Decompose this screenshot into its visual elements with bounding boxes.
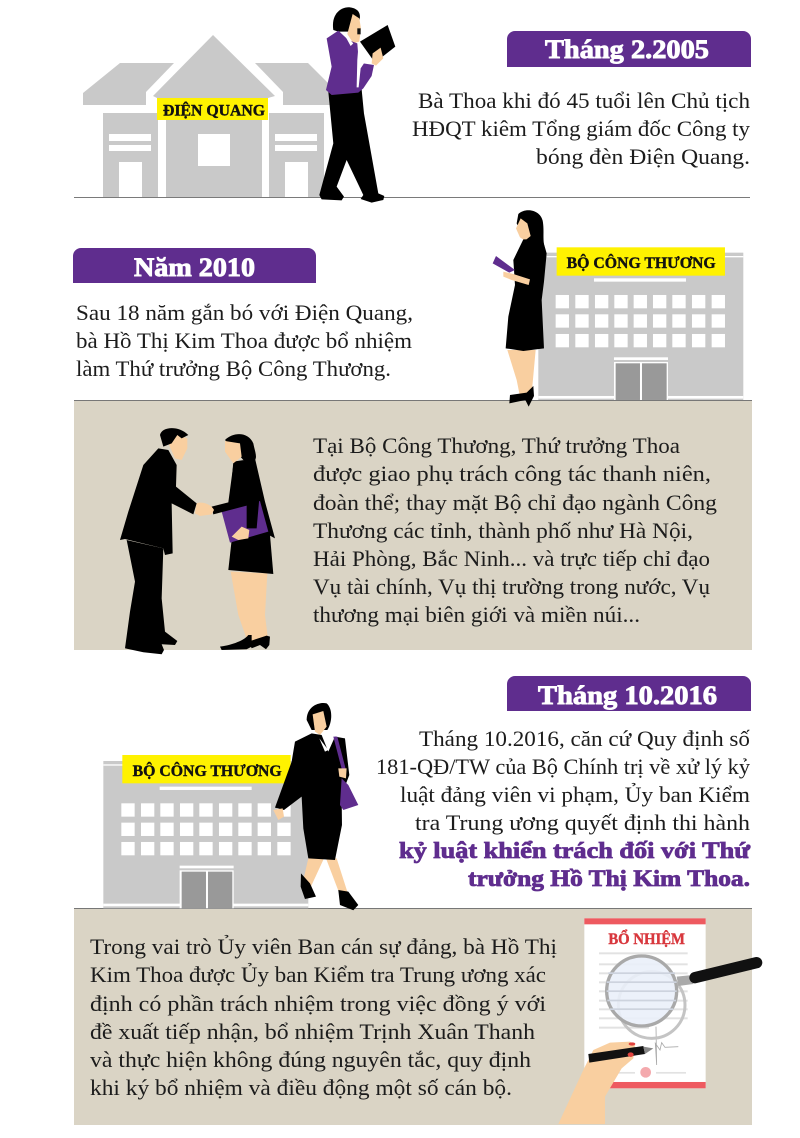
icon: appointment document with magnifier and signing hand bbox=[558, 918, 757, 1124]
figure: woman with purple book bbox=[493, 210, 547, 407]
heading: Năm 2010: Năm 2010 bbox=[134, 253, 255, 282]
text block: responsibility: khi ký bổ nhiệm và điều động một số cán bộ. bbox=[90, 1075, 512, 1100]
text block: duties: Vụ tài chính, Vụ thị trường trong nước, Vụ bbox=[313, 574, 710, 599]
text block: responsibility: Kim Thoa được Ủy ban Kiểm tra Trung ương xác bbox=[90, 962, 546, 987]
heading: Tháng 10.2016 bbox=[507, 676, 751, 711]
baseline rule bbox=[74, 197, 750, 198]
hand holding pen bbox=[558, 1042, 653, 1124]
highlighted text: trưởng Hồ Thị Kim Thoa. bbox=[468, 866, 750, 891]
text block: 2010: làm Thứ trưởng Bộ Công Thương. bbox=[76, 356, 391, 381]
sign: Bộ Công Thương bbox=[122, 755, 291, 783]
figure: man and woman shaking hands bbox=[120, 428, 275, 654]
text block: 2016 bbox=[376, 726, 751, 891]
text block: responsibility: định có phần trách nhiệm trong việc đồng ý với bbox=[90, 991, 546, 1016]
sign: Bộ Công Thương bbox=[557, 247, 725, 276]
building: Điện Quang factory bbox=[83, 35, 332, 197]
text block: duties: đoàn thể; thay mặt Bộ chỉ đạo ngành Công bbox=[313, 490, 717, 515]
sign: Bộ Công Thương: BỘ CÔNG THƯƠNG bbox=[567, 253, 716, 272]
document: Bổ nhiệm: BỔ NHIỆM bbox=[608, 930, 685, 948]
text block: duties: Tại Bộ Công Thương, Thứ trưởng Thoa bbox=[313, 433, 680, 458]
text block: 2005: Bà Thoa khi đó 45 tuổi lên Chủ tịch bbox=[418, 88, 750, 113]
figure: walking woman with handbag bbox=[273, 703, 358, 910]
text block: 2016: 181-QĐ/TW của Bộ Chính trị về xử lý kỷ bbox=[376, 754, 751, 779]
text block: duties: được giao phụ trách công tác thanh niên, bbox=[313, 461, 711, 486]
text block: 2016: tra Trung ương quyết định thi hành bbox=[415, 810, 750, 835]
figure: woman with folder bbox=[319, 7, 395, 203]
heading: Tháng 2.2005: Tháng 2.2005 bbox=[545, 35, 709, 64]
section: February 2005 bbox=[74, 7, 751, 203]
text block: duties: thương mại biên giới và miền núi... bbox=[313, 602, 640, 627]
text block: 2005 bbox=[412, 88, 751, 169]
sign: Bộ Công Thương: BỘ CÔNG THƯƠNG bbox=[133, 761, 282, 780]
highlighted text: kỷ luật khiển trách đối với Thứ bbox=[399, 838, 751, 863]
text block: responsibility: Trong vai trò Ủy viên Ban cán sự đảng, bà Hồ Thị bbox=[90, 934, 557, 959]
building: Bộ Công Thương bbox=[103, 755, 308, 908]
text block: responsibility bbox=[90, 934, 557, 1100]
panel: responsibility bbox=[74, 908, 757, 1125]
text block: 2016: Tháng 10.2016, căn cứ Quy định số bbox=[419, 726, 750, 751]
section: October 2016 bbox=[103, 676, 751, 910]
text block: duties bbox=[313, 433, 717, 627]
sign: Điện Quang: ĐIỆN QUANG bbox=[163, 102, 266, 120]
panel: Vice minister duties bbox=[74, 400, 752, 654]
heading: Năm 2010 bbox=[73, 248, 316, 283]
document: Bổ nhiệm bbox=[584, 918, 706, 1088]
text block: 2005: HĐQT kiêm Tổng giám đốc Công ty bbox=[412, 116, 751, 141]
text block: duties: Thương các tỉnh, thành phố như Hà Nội, bbox=[313, 518, 693, 543]
text block: 2010 bbox=[76, 300, 413, 381]
heading: Tháng 10.2016: Tháng 10.2016 bbox=[538, 681, 717, 710]
text block: 2016: luật đảng viên vi phạm, Ủy ban Kiểm bbox=[400, 782, 751, 807]
building: Bộ Công Thương bbox=[538, 247, 743, 400]
heading: Tháng 2.2005 bbox=[507, 31, 751, 67]
text block: 2010: Sau 18 năm gắn bó với Điện Quang, bbox=[76, 300, 413, 325]
text block: responsibility: và thực hiện không đúng nguyên tắc, quy định bbox=[90, 1047, 531, 1072]
text block: duties: Hải Phòng, Bắc Ninh... và trực tiếp chỉ đạo bbox=[313, 546, 710, 571]
magnifying glass bbox=[607, 956, 757, 1038]
text block: 2010: bà Hồ Thị Kim Thoa được bổ nhiệm bbox=[76, 328, 413, 353]
highlighted text bbox=[399, 838, 751, 891]
text block: responsibility: đề xuất tiếp nhận, bổ nhiệm Trịnh Xuân Thanh bbox=[90, 1019, 535, 1044]
text block: 2005: bóng đèn Điện Quang. bbox=[536, 144, 750, 169]
section: 2010 bbox=[73, 210, 743, 407]
